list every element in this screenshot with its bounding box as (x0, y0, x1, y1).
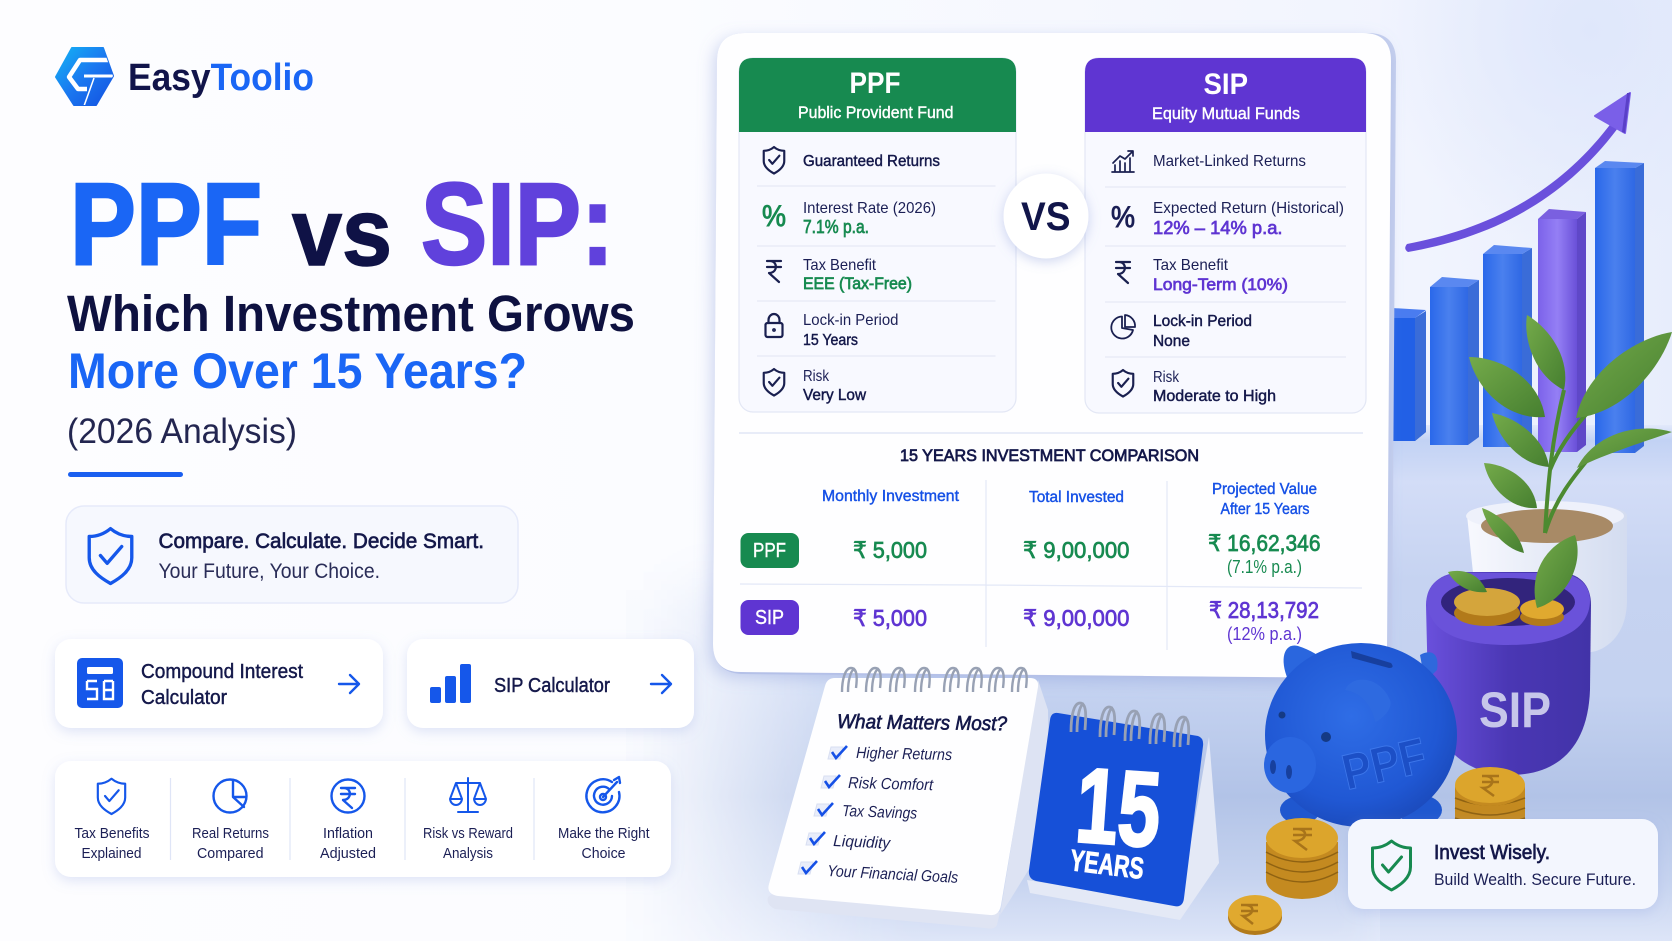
snout (1264, 737, 1316, 793)
label: Compound Interest (141, 661, 303, 683)
tagline text: Your Future, Your Choice. (158, 560, 380, 583)
feature: risk vs reward: Analysis (443, 846, 493, 862)
checklist (827, 745, 959, 887)
bar 3 (1483, 245, 1532, 447)
feature: inflation: Adjusted (320, 846, 376, 862)
feature: real returns: Real Returns (192, 826, 269, 842)
feature: tax benefits (74, 779, 150, 862)
title: vs: vs (292, 179, 392, 286)
row: lock-in: None (1153, 333, 1190, 350)
VS badge: VS (1021, 195, 1070, 239)
column: SIP (1085, 58, 1366, 413)
PPF header (739, 58, 1016, 132)
column: PPF (739, 58, 1016, 412)
PPF header: PPF (850, 67, 900, 100)
chart: growth bars (1392, 161, 1644, 453)
row: lock-in: Lock-in Period (803, 312, 898, 329)
row: guaranteed returns (764, 147, 940, 174)
spiral rings (842, 668, 1027, 692)
callout text (1434, 842, 1636, 889)
row: risk: Risk (1153, 369, 1180, 386)
row: risk (764, 368, 866, 404)
row: lock-in (1111, 313, 1252, 350)
panel: tagline (66, 506, 518, 603)
row: SIP: ₹ 5,000 (853, 605, 927, 631)
row: risk: Very Low (803, 387, 866, 404)
illustration: 15 years calendar (1027, 703, 1219, 920)
illustration: notebook (768, 668, 1050, 929)
title: PPF: PPF (70, 159, 262, 289)
label (141, 661, 303, 709)
bar 4 (1538, 209, 1586, 452)
column headers: Monthly Investment (822, 488, 960, 505)
card: SIP calculator (407, 639, 694, 728)
row: SIP: ₹ 9,00,000 (1023, 605, 1130, 631)
icon: green shield (1372, 841, 1410, 890)
checklist: Higher Returns (856, 745, 952, 764)
row: market-linked: Market-Linked Returns (1153, 153, 1306, 170)
subtitle line 1: Which Investment Grows (67, 285, 635, 342)
bar 5 (1595, 161, 1644, 453)
illustration: coin stack left (1266, 818, 1338, 899)
row: tax benefit (767, 257, 912, 293)
subtitle year: (2026 Analysis) (67, 412, 297, 451)
pot label: SIP (1479, 682, 1551, 738)
background (661, 0, 1672, 941)
row: market-linked (1112, 151, 1306, 172)
row: PPF: PPF (753, 540, 786, 562)
checkmarks (798, 746, 847, 874)
row: risk (1113, 369, 1276, 405)
icon: shield (89, 529, 132, 584)
subtitle line 2: More Over 15 Years? (68, 343, 527, 399)
tagline text (158, 530, 484, 583)
feature: right choice: Choice (582, 846, 626, 862)
panel: main comparison (713, 33, 1396, 680)
feature: inflation (320, 780, 376, 862)
SIP header: Equity Mutual Funds (1152, 104, 1300, 123)
illustration: flat coin (1228, 895, 1282, 935)
calendar label: YEARS (1068, 844, 1146, 886)
illustration: SIP pot (1426, 535, 1591, 775)
feature: tax benefits: Tax Benefits (74, 826, 150, 842)
row: PPF: (7.1% p.a.) (1227, 557, 1302, 577)
pot leaves (1448, 535, 1578, 608)
VS badge (1004, 174, 1088, 258)
row: tax benefit: EEE (Tax-Free) (803, 274, 912, 293)
illustration: white pot with plant (1466, 315, 1672, 652)
logo (56, 48, 314, 106)
calendar rings (1071, 703, 1189, 747)
illustration: PPF piggy bank (1264, 643, 1457, 827)
callout text: Build Wealth. Secure Future. (1434, 870, 1636, 889)
illustration: coin stack right (1455, 767, 1525, 828)
row: SIP: SIP (755, 607, 784, 629)
table heading: 15 YEARS INVESTMENT COMPARISON (900, 446, 1199, 465)
column headers (822, 481, 1317, 518)
column headers: After 15 Years (1220, 501, 1310, 518)
row: guaranteed returns: Guaranteed Returns (803, 153, 940, 170)
row: lock-in: 15 Years (803, 332, 858, 349)
checklist: Your Financial Goals (827, 863, 959, 887)
checklist: Tax Savings (842, 803, 917, 823)
tagline text: Compare. Calculate. Decide Smart. (158, 530, 484, 553)
coins in pot (1454, 588, 1564, 626)
row: PPF: ₹ 16,62,346 (1208, 530, 1320, 556)
feature: risk vs reward: Risk vs Reward (423, 826, 513, 842)
title: SIP: SIP: (421, 159, 614, 289)
brand name: EasyToolio (128, 57, 314, 99)
icon: EasyToolio hexagon mark (56, 48, 114, 106)
feature: real returns (192, 780, 269, 862)
row: PPF: ₹ 5,000 (853, 537, 927, 563)
feet (1280, 795, 1442, 825)
icon: calculator (77, 658, 123, 708)
column headers: Total Invested (1029, 489, 1124, 506)
feature: inflation: Inflation (323, 826, 373, 842)
row: tax benefit (1116, 257, 1288, 294)
row: interest rate: % (762, 200, 786, 233)
feature: right choice: Make the Right (558, 826, 650, 842)
row: tax benefit: Long-Term (10%) (1153, 275, 1288, 294)
row: expected return: Expected Return (Historical) (1153, 200, 1344, 217)
bar 1 (1392, 308, 1426, 441)
row: interest rate (762, 200, 936, 237)
SIP header: SIP (1204, 68, 1248, 101)
feature: tax benefits: Explained (82, 846, 142, 862)
row: lock-in: Lock-in Period (1153, 313, 1252, 330)
row: PPF: ₹ 9,00,000 (1023, 537, 1130, 563)
arrow (651, 675, 671, 693)
arrow (339, 675, 359, 693)
panel: features (55, 761, 671, 877)
title (67, 159, 635, 451)
row: expected return: % (1111, 201, 1135, 234)
label: Calculator (141, 687, 227, 709)
row: risk: Moderate to High (1153, 388, 1276, 405)
feature: real returns: Compared (197, 846, 264, 862)
table: 15 years comparison (740, 446, 1362, 650)
row: lock-in (766, 312, 898, 349)
row: tax benefit: Tax Benefit (803, 257, 877, 274)
callout text: Invest Wisely. (1434, 842, 1550, 864)
feature: right choice (558, 777, 650, 862)
SIP header (1085, 58, 1366, 132)
card: compound interest calculator (55, 639, 383, 728)
row: interest rate: Interest Rate (2026) (803, 200, 936, 217)
row: SIP: (12% p.a.) (1227, 624, 1302, 644)
label: SIP Calculator (494, 675, 610, 697)
row: SIP: ₹ 28,13,792 (1209, 597, 1319, 623)
column headers: Projected Value (1212, 481, 1317, 498)
row: expected return: 12% – 14% p.a. (1153, 218, 1282, 238)
row: expected return (1111, 200, 1344, 238)
PPF header: Public Provident Fund (798, 103, 954, 122)
row: PPF (740, 530, 1320, 577)
bar 2 (1430, 277, 1479, 445)
calendar number: 15 (1072, 746, 1164, 870)
row: interest rate: 7.1% p.a. (803, 217, 869, 237)
arrow: growth trend (1405, 93, 1630, 252)
row: tax benefit: Tax Benefit (1153, 257, 1229, 274)
callout: invest wisely (1348, 819, 1658, 909)
feature: risk vs reward (423, 778, 513, 862)
checklist: Liquidity (833, 833, 891, 853)
row: risk: Risk (803, 368, 830, 385)
checklist: Risk Comfort (848, 775, 934, 794)
row: SIP (740, 597, 1319, 644)
icon: bars (430, 664, 471, 703)
piggy label: PPF (1337, 727, 1431, 801)
notebook heading: What Matters Most? (837, 711, 1008, 735)
leaves (1469, 315, 1672, 553)
